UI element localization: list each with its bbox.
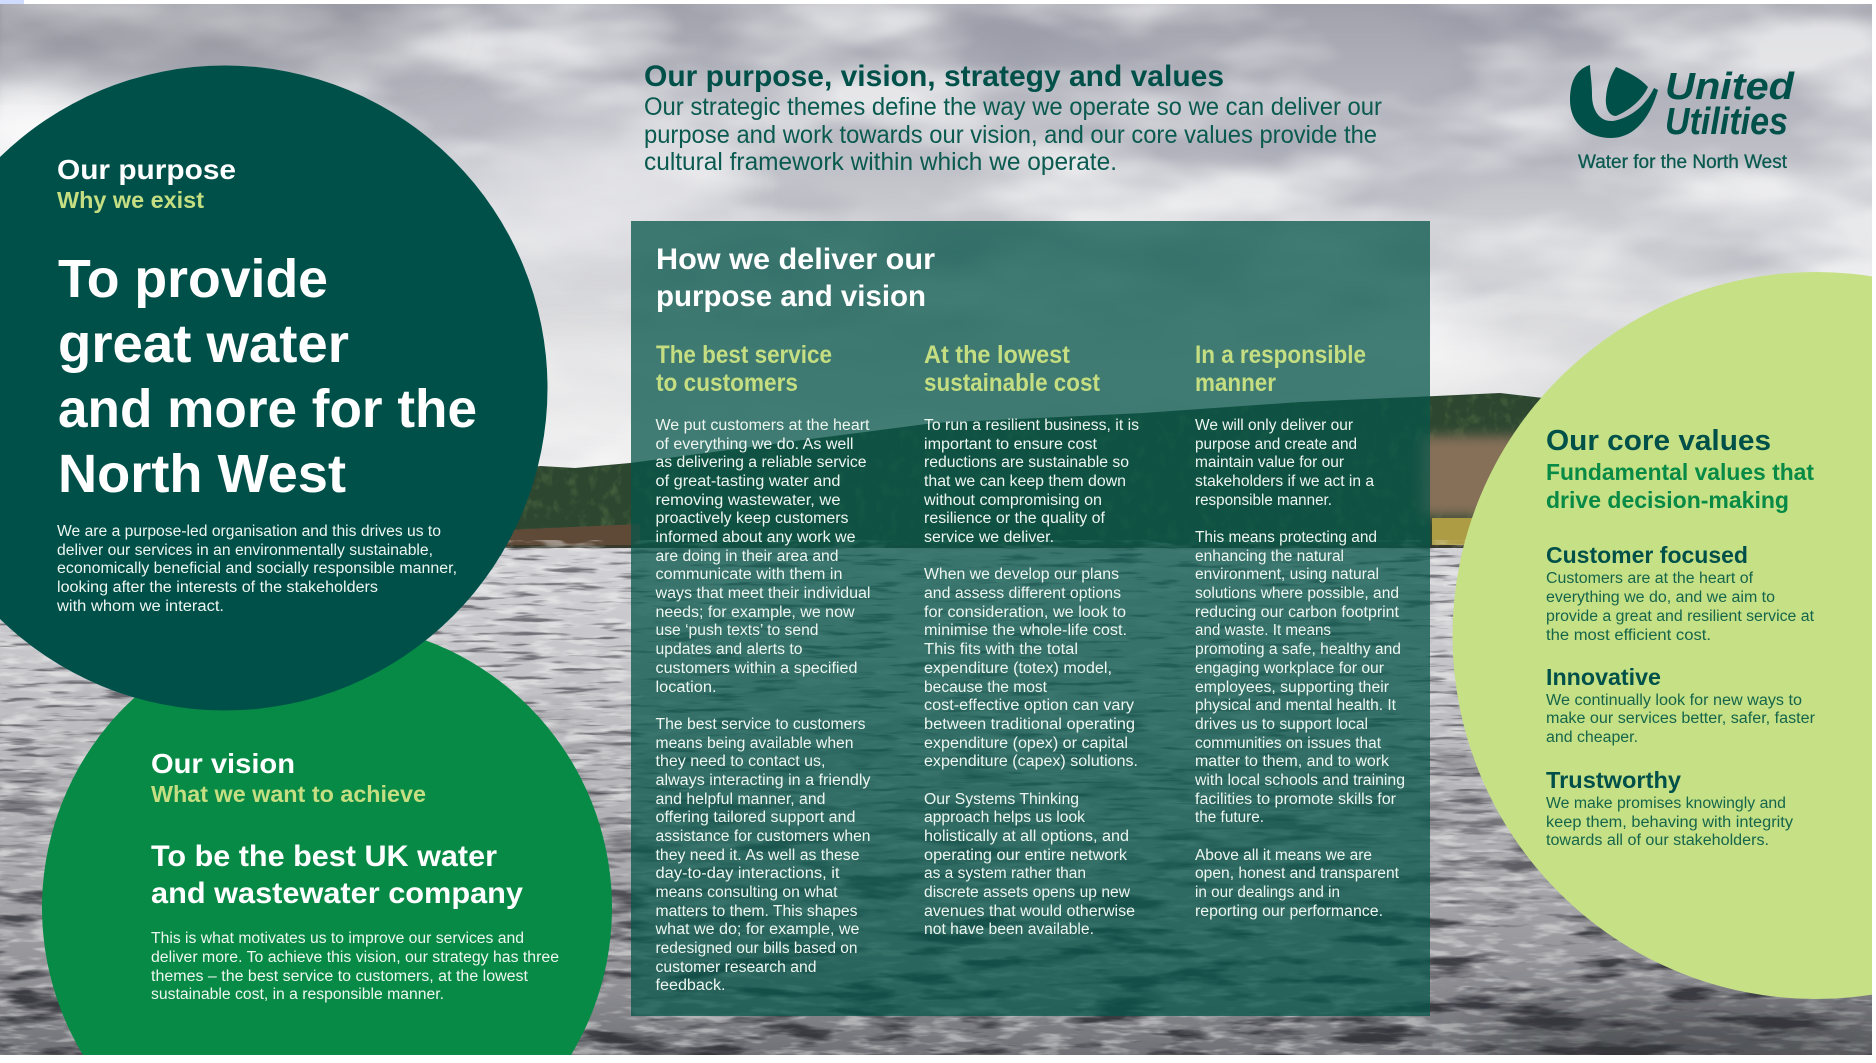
panel: our purpose circle [0, 66, 548, 710]
column 3: in a responsible manner: drives us to support local [1195, 716, 1368, 733]
value: customer focused: provide a great and resilient service at [1546, 608, 1815, 625]
vision statement: and wastewater company [151, 877, 523, 910]
column 2: at the lowest sustainable cost: between traditional operating [924, 716, 1135, 733]
purpose statement: great water [58, 314, 349, 374]
column 1: the best service to customers: means being available when [656, 735, 854, 752]
column 1: the best service to customers: location. [656, 679, 716, 696]
column 2: at the lowest sustainable cost: This fits with the total [924, 641, 1078, 658]
column 2: at the lowest sustainable cost: approach helps us look [924, 809, 1085, 826]
vision heading: Our vision [151, 748, 295, 779]
value: trustworthy: Trustworthy [1546, 767, 1681, 793]
column 2: at the lowest sustainable cost: resilience or the quality of [924, 510, 1106, 527]
column 2: at the lowest sustainable cost: expenditure (totex) model, [924, 660, 1112, 677]
column 2: at the lowest sustainable cost: discrete assets opens up new [924, 884, 1131, 901]
column 1: the best service to customers: We put customers at the heart [656, 417, 870, 434]
column 1: the best service to customers: feedback. [656, 977, 726, 994]
value: innovative: Innovative [1546, 664, 1661, 690]
logo mark [1570, 65, 1658, 138]
column 3: in a responsible manner: reporting our performance. [1195, 903, 1383, 920]
value: innovative: make our services better, safer, faster [1546, 710, 1815, 727]
column 3: in a responsible manner: This means protecting and [1195, 529, 1377, 546]
vision body text: This is what motivates us to improve our services and [151, 930, 524, 947]
panel: our core values circle [1452, 272, 1876, 999]
logo: United Utilities [1570, 65, 1795, 173]
column 1: the best service to customers: offering tailored support and [656, 809, 856, 826]
value: trustworthy: keep them, behaving with integrity [1546, 814, 1793, 831]
value: innovative [1546, 664, 1815, 746]
column 3: in a responsible manner: open, honest and transparent [1195, 865, 1400, 882]
top-left screen artefact [0, 0, 24, 4]
column 1: the best service to customers: of great-tasting water and [656, 473, 840, 490]
vision body text: themes – the best service to customers, at the lowest [151, 968, 529, 985]
column 2: at the lowest sustainable cost: reductions are sustainable so [924, 454, 1129, 471]
vision statement: To be the best UK water [151, 840, 497, 873]
value: innovative: and cheaper. [1546, 729, 1638, 746]
value: customer focused: the most efficient cost. [1546, 627, 1711, 644]
vision statement [151, 840, 523, 910]
column 1: the best service to customers: as delivering a reliable service [656, 454, 866, 471]
column 3: in a responsible manner: physical and mental health. It [1195, 697, 1397, 714]
column 1: the best service to customers [654, 341, 871, 994]
column 3: in a responsible manner: stakeholders if we act in a [1195, 473, 1374, 490]
column 3: in a responsible manner: communities on issues that [1195, 735, 1382, 752]
column 3: in a responsible manner: in our dealings and in [1195, 884, 1340, 901]
column 3: in a responsible manner: promoting a safe, healthy and [1195, 641, 1401, 658]
vision subheading: What we want to achieve [151, 781, 426, 807]
column 2: at the lowest sustainable cost: Our Systems Thinking [924, 791, 1079, 808]
column 2: at the lowest sustainable cost: service we deliver. [924, 529, 1054, 546]
vision body text [151, 930, 559, 1003]
column 2: at the lowest sustainable cost: because the most [924, 679, 1048, 696]
column 2: at the lowest sustainable cost: avenues that would otherwise [924, 903, 1135, 920]
column 3: in a responsible manner: maintain value for our [1195, 454, 1344, 471]
column 1: the best service to customers: redesigned our bills based on [656, 940, 858, 957]
core values subheading: Fundamental values that [1546, 459, 1814, 485]
column 2: at the lowest sustainable cost: without compromising on [923, 492, 1102, 509]
logo wordmark: United [1665, 66, 1795, 108]
purpose body text: We are a purpose-led organisation and this drives us to [57, 523, 441, 540]
column 3: in a responsible manner: facilities to promote skills for [1195, 791, 1396, 808]
column 1: the best service to customers: are doing in their area and [656, 548, 838, 565]
column 2: at the lowest sustainable cost: expenditure (capex) solutions. [924, 753, 1138, 770]
column 1: the best service to customers: they need it. As well as these [656, 847, 860, 864]
core values subheading [1546, 459, 1814, 513]
column 1: the best service to customers: day-to-day interactions, it [656, 865, 840, 882]
purpose heading: Our purpose [57, 154, 236, 185]
column 2: at the lowest sustainable cost: for consideration, we look to [924, 604, 1126, 621]
column 1: the best service to customers: The best service to customers [656, 716, 866, 733]
purpose body text: deliver our services in an environmentally sustainable, [57, 542, 433, 559]
column 1: the best service to customers: needs; for example, we now [656, 604, 855, 621]
page title: Our purpose, vision, strategy and values [644, 60, 1224, 93]
column 3: in a responsible manner [1194, 341, 1405, 920]
core values heading: Our core values [1546, 425, 1771, 457]
column 2: at the lowest sustainable cost: At the lowest [924, 341, 1071, 369]
value: trustworthy: towards all of our stakeholders. [1546, 832, 1769, 849]
column 3: in a responsible manner: In a responsible [1195, 341, 1366, 369]
column 1: the best service to customers: ways that meet their individual [654, 585, 870, 602]
value: trustworthy [1546, 767, 1793, 849]
panel heading: purpose and vision [656, 280, 926, 313]
purpose body text: looking after the interests of the stakeholders [57, 579, 378, 596]
value: customer focused: Customers are at the heart of [1546, 570, 1754, 587]
column 3: in a responsible manner: We will only deliver our [1195, 417, 1353, 434]
column 2: at the lowest sustainable cost: as a system rather than [924, 865, 1086, 882]
value: trustworthy: We make promises knowingly and [1546, 795, 1786, 812]
column 1: the best service to customers: assistance for customers when [656, 828, 870, 845]
column 2: at the lowest sustainable cost: operating our entire network [924, 847, 1127, 864]
column 1: the best service to customers: removing wastewater, we [656, 492, 840, 509]
column 3: in a responsible manner: matter to them, and to work [1195, 753, 1389, 770]
column 1: the best service to customers: communicate with them in [656, 566, 842, 583]
column 1: the best service to customers: customer research and [656, 959, 816, 976]
column 3: in a responsible manner: engaging workplace for our [1195, 660, 1384, 677]
value: customer focused [1546, 542, 1815, 644]
column 3: in a responsible manner: the future. [1195, 809, 1264, 826]
column 1: the best service to customers: they need to contact us, [656, 753, 826, 770]
purpose statement: and more for the [58, 379, 477, 439]
column 3: in a responsible manner: employees, supporting their [1195, 679, 1389, 696]
column 2: at the lowest sustainable cost: and assess different options [924, 585, 1121, 602]
column 1: the best service to customers: what we do; for example, we [654, 921, 860, 938]
column 2: at the lowest sustainable cost: holistically at all options, and [924, 828, 1129, 845]
column 3: in a responsible manner: with local schools and training [1194, 772, 1405, 789]
column 2: at the lowest sustainable cost: When we develop our plans [924, 566, 1119, 583]
column 3: in a responsible manner: environment, using natural [1195, 566, 1379, 583]
intro paragraph: purpose and work towards our vision, and our core values provide the [644, 121, 1377, 149]
logo wordmark [1665, 66, 1795, 143]
purpose body text: with whom we interact. [56, 598, 224, 615]
column 3: in a responsible manner: Above all it means we are [1195, 847, 1372, 864]
purpose statement: To provide [58, 249, 328, 309]
column 2: at the lowest sustainable cost: important to ensure cost [924, 436, 1098, 453]
column 2: at the lowest sustainable cost: expenditure (opex) or capital [924, 735, 1128, 752]
column 3: in a responsible manner: solutions where possible, and [1195, 585, 1399, 602]
column 3: in a responsible manner: purpose and create and [1195, 436, 1357, 453]
value: customer focused: Customer focused [1546, 542, 1748, 568]
column 3: in a responsible manner: responsible manner. [1195, 492, 1332, 509]
column 1: the best service to customers: of everything we do. As well [656, 436, 854, 453]
purpose statement [58, 249, 477, 504]
column 3: in a responsible manner: and waste. It means [1195, 622, 1331, 639]
value: customer focused: everything we do, and we aim to [1546, 589, 1775, 606]
column 1: the best service to customers: always interacting in a friendly [656, 772, 871, 789]
value: innovative: We continually look for new ways to [1546, 692, 1802, 709]
column 3: in a responsible manner: manner [1195, 369, 1276, 397]
vision body text: deliver more. To achieve this vision, our strategy has three [151, 949, 559, 966]
column 2: at the lowest sustainable cost: not have been available. [924, 921, 1094, 938]
column 1: the best service to customers: customers within a specified [656, 660, 858, 677]
column 1: the best service to customers: The best service [656, 341, 832, 369]
column 2: at the lowest sustainable cost: minimise the whole-life cost. [924, 622, 1127, 639]
logo tagline: Water for the North West [1578, 152, 1788, 173]
logo wordmark: Utilities [1665, 101, 1788, 143]
column 1: the best service to customers: and helpful manner, and [656, 791, 826, 808]
panel heading: How we deliver our [656, 243, 935, 276]
column 1: the best service to customers: updates and alerts to [656, 641, 802, 658]
purpose subheading: Why we exist [57, 187, 204, 213]
column 1: the best service to customers: means consulting on what [656, 884, 838, 901]
purpose statement: North West [58, 444, 346, 504]
column 2: at the lowest sustainable cost [923, 341, 1139, 938]
column 2: at the lowest sustainable cost: sustainable cost [924, 369, 1101, 397]
column 2: at the lowest sustainable cost: To run a resilient business, it is [924, 417, 1139, 434]
intro paragraph: cultural framework within which we operate. [644, 148, 1117, 176]
panel: our vision circle [42, 623, 612, 1055]
vision body text: sustainable cost, in a responsible manner. [151, 986, 444, 1003]
column 3: in a responsible manner: enhancing the natural [1195, 548, 1344, 565]
column 1: the best service to customers: informed about any work we [656, 529, 856, 546]
purpose body text: economically beneficial and socially responsible manner, [57, 560, 457, 577]
panel heading [656, 243, 935, 313]
column 1: the best service to customers: use ‘push texts’ to send [656, 622, 818, 639]
column 1: the best service to customers: to customers [656, 369, 798, 397]
column 3: in a responsible manner: reducing our carbon footprint [1195, 604, 1400, 621]
column 2: at the lowest sustainable cost: that we can keep them down [924, 473, 1126, 490]
panel: how we deliver our purpose and vision [631, 221, 1430, 1016]
column 1: the best service to customers: matters to them. This shapes [656, 903, 858, 920]
intro paragraph: Our strategic themes define the way we operate so we can deliver our [644, 93, 1382, 121]
column 1: the best service to customers: proactively keep customers [656, 510, 849, 527]
purpose body text [56, 523, 457, 615]
intro paragraph [644, 93, 1382, 176]
column 2: at the lowest sustainable cost: cost-effective option can vary [924, 697, 1134, 714]
core values subheading: drive decision-making [1546, 487, 1789, 513]
